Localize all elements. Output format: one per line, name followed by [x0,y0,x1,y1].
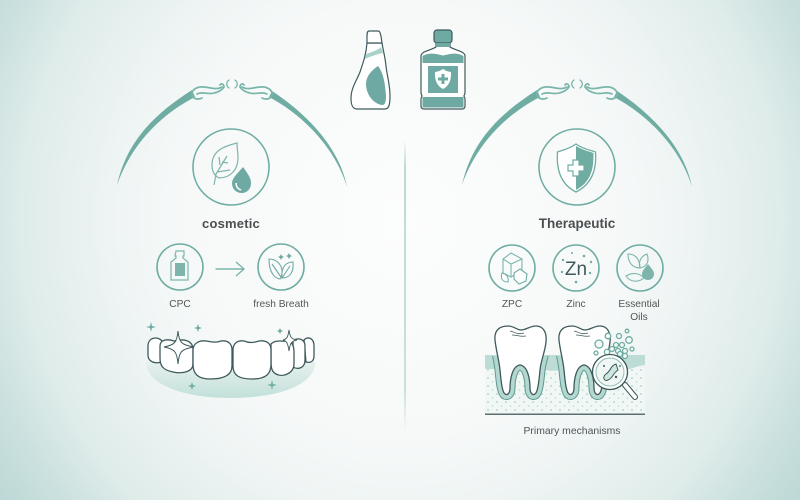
label: Essential Oils: Oils [630,312,648,323]
panel: cosmetic [117,80,347,398]
label: primary mechanisms: Primary mechanisms [524,426,620,437]
icon: CPC bottle [157,244,203,290]
arrow [216,262,244,276]
icon: Zinc [553,245,599,291]
heading: cosmetic: cosmetic [202,216,260,231]
icon: cosmetic bottle [351,31,390,109]
icon: fresh leaves [258,244,304,290]
icon: ZPC cubes [489,245,535,291]
illustration: smile teeth [146,322,315,398]
baseline [485,414,645,415]
arc ornament: cosmetic [117,80,347,187]
icon: leaf and drop [193,129,269,205]
panel: therapeutic [462,80,692,437]
label: Zinc: Zinc [566,299,586,310]
icon: Zinc: Zn [565,259,587,280]
arc ornament: therapeutic [462,80,692,187]
heading: therapeutic: Therapeutic [539,216,616,231]
icon: therapeutic bottle [421,30,465,109]
magnifier [592,354,635,397]
center divider [404,140,406,432]
label: Essential Oils: Essential [618,299,660,310]
icon: shield [539,129,615,205]
illustration: teeth cross section [485,326,645,415]
bacteria bubbles [594,329,634,358]
label: fresh Breath: fresh Breath [253,299,309,310]
icon: essential oils [617,245,663,291]
label: ZPC: ZPC [502,299,522,310]
label: CPC: CPC [169,299,191,310]
